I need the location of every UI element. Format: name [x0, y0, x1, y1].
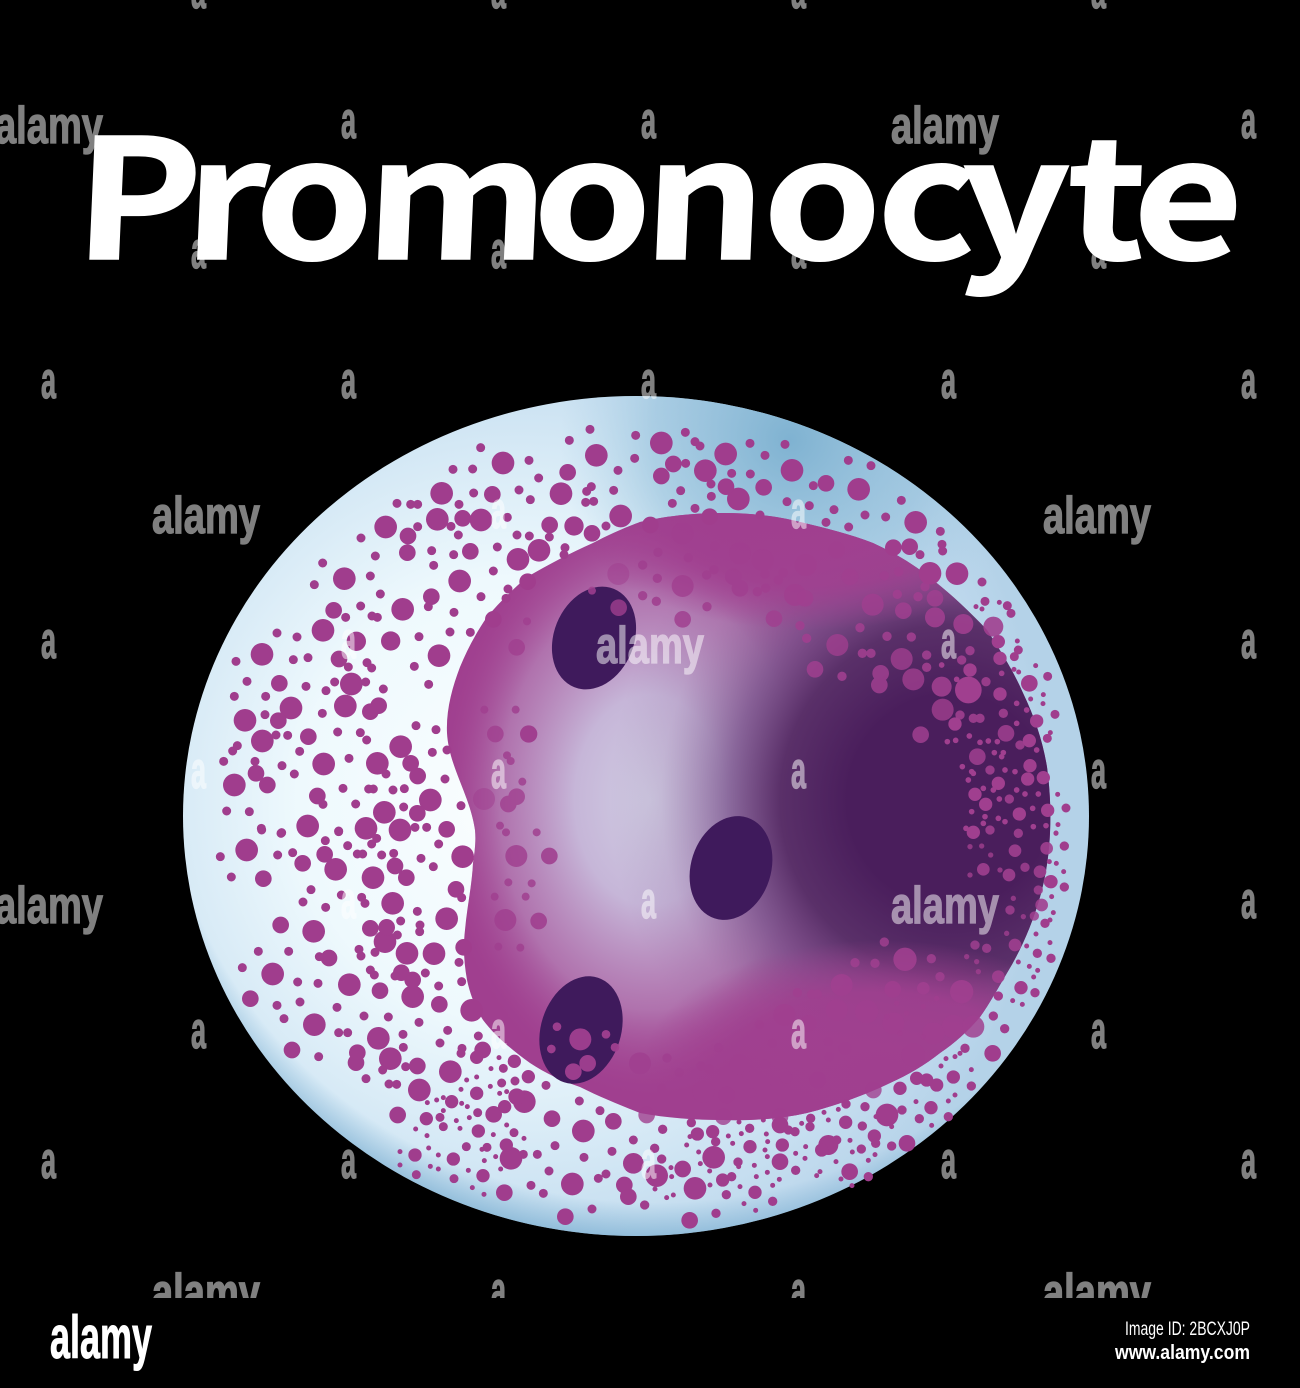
footer logo: alamy — [50, 1304, 152, 1371]
watermarks: a — [341, 352, 357, 410]
watermarks: a — [1241, 872, 1257, 930]
watermarks: a — [41, 612, 57, 670]
granules: nucleus lower left — [495, 856, 615, 1072]
watermarks: a — [791, 1262, 807, 1320]
nucleolus: centre — [677, 805, 785, 931]
footer band — [0, 1298, 1300, 1388]
watermarks over cell: a — [341, 612, 357, 670]
granules: upper right — [650, 432, 1066, 833]
watermarks over cell: a — [191, 742, 207, 800]
watermarks: alamy — [152, 487, 260, 545]
granules: nucleus upper left — [484, 574, 619, 832]
watermarks over cell: a — [791, 742, 807, 800]
granules in cytoplasm — [220, 429, 1066, 1220]
image id: Image ID: 2BCXJ0P — [1125, 1319, 1250, 1340]
watermarks: a — [1241, 612, 1257, 670]
watermarks over cell — [191, 352, 1107, 1190]
watermarks over cell: a — [491, 1002, 507, 1060]
watermarks: a — [191, 1002, 207, 1060]
watermarks: a — [1241, 1132, 1257, 1190]
watermarks over cell: a — [641, 872, 657, 930]
watermarks over cell: a — [341, 872, 357, 930]
granules: nucleus lower right — [640, 846, 1050, 1117]
watermarks: a — [491, 222, 507, 280]
nucleolus: lower — [526, 965, 636, 1095]
granules: upper left — [224, 429, 636, 833]
watermarks: alamy — [1043, 487, 1151, 545]
nucleolus: upper — [537, 574, 651, 702]
granules: nucleus upper right — [643, 533, 1048, 833]
watermarks over cell: alamy — [596, 617, 704, 675]
watermarks over cell: a — [641, 1132, 657, 1190]
nucleus — [440, 505, 1060, 1125]
watermarks: a — [191, 222, 207, 280]
watermarks over cell: a — [491, 482, 507, 540]
watermarks: a — [491, 1262, 507, 1320]
watermarks over cell: alamy — [891, 877, 999, 935]
granules: lower left — [220, 830, 633, 1217]
watermarks over cell: a — [941, 612, 957, 670]
cell: promonocyte — [183, 396, 1089, 1236]
watermarks: a — [641, 92, 657, 150]
cell body: cytoplasm — [183, 396, 1089, 1236]
watermarks: a — [341, 92, 357, 150]
watermarks: a — [1241, 352, 1257, 410]
granules: lower right — [645, 833, 1064, 1220]
title: Promonocyte — [71, 67, 1249, 307]
watermarks: a — [791, 222, 807, 280]
watermarks over cell: a — [641, 352, 657, 410]
watermarks: alamy — [1043, 1264, 1151, 1322]
watermarks over cell: a — [791, 482, 807, 540]
watermarks: a — [341, 1132, 357, 1190]
watermarks: a — [1091, 222, 1107, 280]
watermarks: alamy — [152, 1264, 260, 1322]
watermarks over cell: a — [1091, 742, 1107, 800]
watermarks: a — [1241, 92, 1257, 150]
watermarks: a — [941, 352, 957, 410]
watermarks: a — [1091, 1002, 1107, 1060]
granules inside nucleus — [484, 533, 1050, 1117]
watermarks over cell: a — [491, 742, 507, 800]
watermarks over cell: a — [791, 1002, 807, 1060]
watermarks: a — [41, 1132, 57, 1190]
watermarks: alamy — [891, 97, 999, 155]
watermarks: a — [941, 1132, 957, 1190]
website: www.alamy.com — [1114, 1342, 1250, 1364]
watermarks: a — [41, 352, 57, 410]
